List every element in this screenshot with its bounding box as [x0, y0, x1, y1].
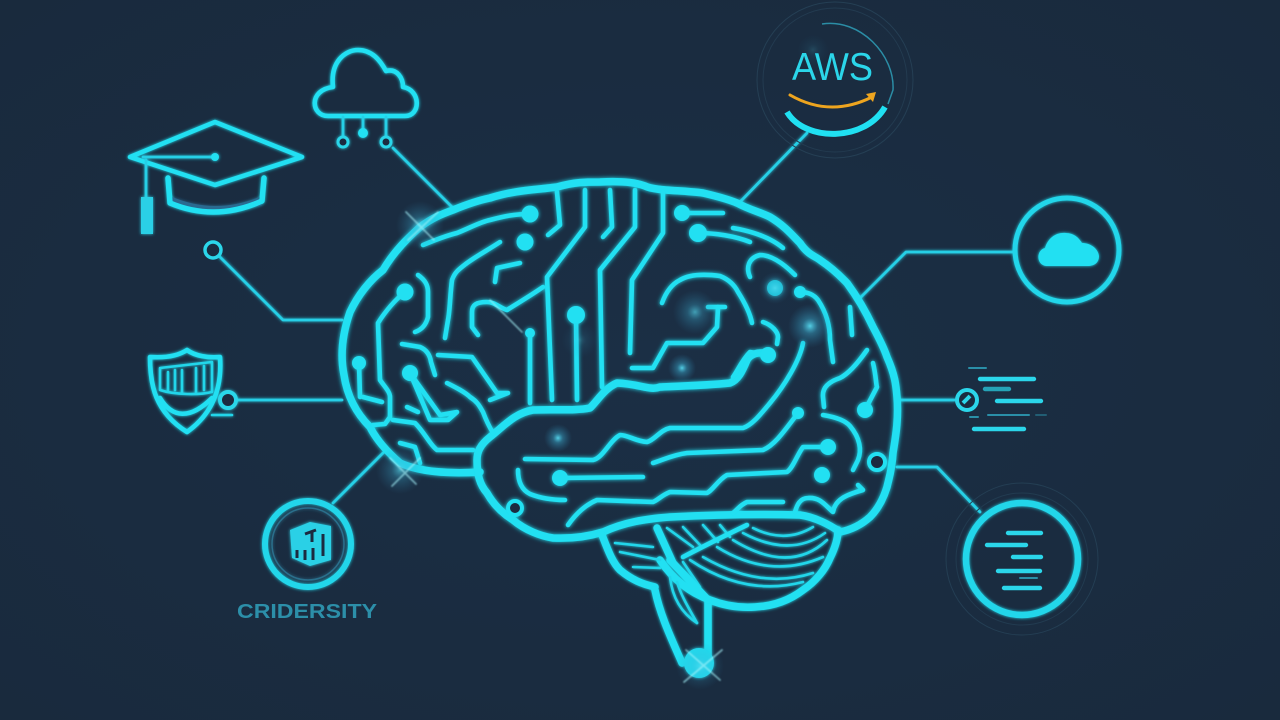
cerebellum folds — [753, 527, 813, 536]
smile arrow — [790, 95, 872, 107]
glow highlights — [376, 201, 832, 690]
icon: data lines node — [957, 368, 1046, 429]
label: university: CRIDERSITY — [237, 601, 378, 623]
right lobe traces — [662, 205, 885, 470]
brain outline — [342, 182, 898, 532]
temporal lobe traces — [508, 343, 863, 525]
cerebellum rim — [602, 530, 838, 607]
icon: AWS badge — [757, 2, 913, 158]
icon: list circle — [946, 483, 1098, 635]
AWS wordmark: AWS — [792, 46, 873, 89]
icon: graduation cap — [130, 122, 302, 234]
bottom arc — [787, 107, 885, 134]
icon: cloud circle — [1015, 198, 1119, 302]
cerebellum and brain stem — [602, 525, 838, 678]
node: left connector — [205, 242, 221, 258]
connector lines — [219, 133, 1013, 512]
icon: university badge — [265, 501, 351, 587]
icon: cloud network — [315, 50, 417, 147]
left lobe traces — [352, 206, 543, 463]
temporal lobe outline — [477, 353, 840, 538]
brain stem — [655, 590, 682, 663]
icon: shield — [150, 350, 236, 432]
central vertical traces — [525, 190, 725, 403]
brain illustration — [342, 182, 898, 538]
